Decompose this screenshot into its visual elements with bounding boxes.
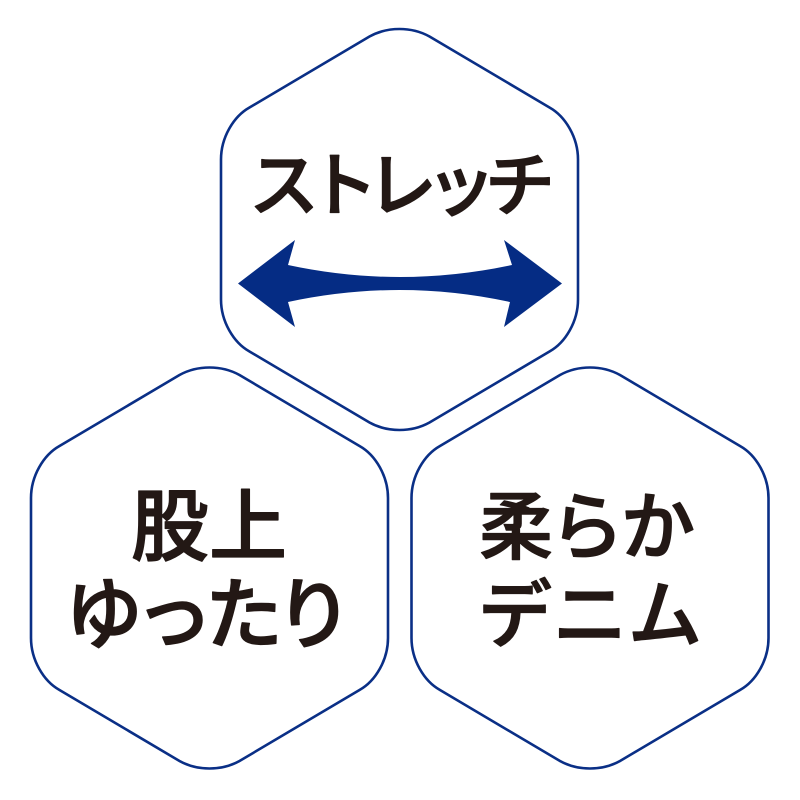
- panel: soft denim: [412, 368, 768, 768]
- hexagon outline: stretch: [221, 29, 578, 430]
- heading: roomy rise, line 2: ゆったり: [65, 571, 353, 659]
- heading: stretch: ストレッチ: [249, 147, 555, 225]
- heading: roomy rise, line 1: 股上: [131, 483, 287, 571]
- panel: roomy rise: [31, 368, 388, 768]
- heading: soft denim, line 1: 柔らか: [479, 486, 695, 569]
- hexagon outline: roomy rise: [31, 368, 388, 768]
- icon: double-headed stretch arrow: [238, 240, 562, 327]
- panel: stretch: [221, 29, 578, 430]
- hexagon outline: soft denim: [412, 368, 768, 768]
- heading: soft denim, line 2: デニム: [478, 574, 702, 657]
